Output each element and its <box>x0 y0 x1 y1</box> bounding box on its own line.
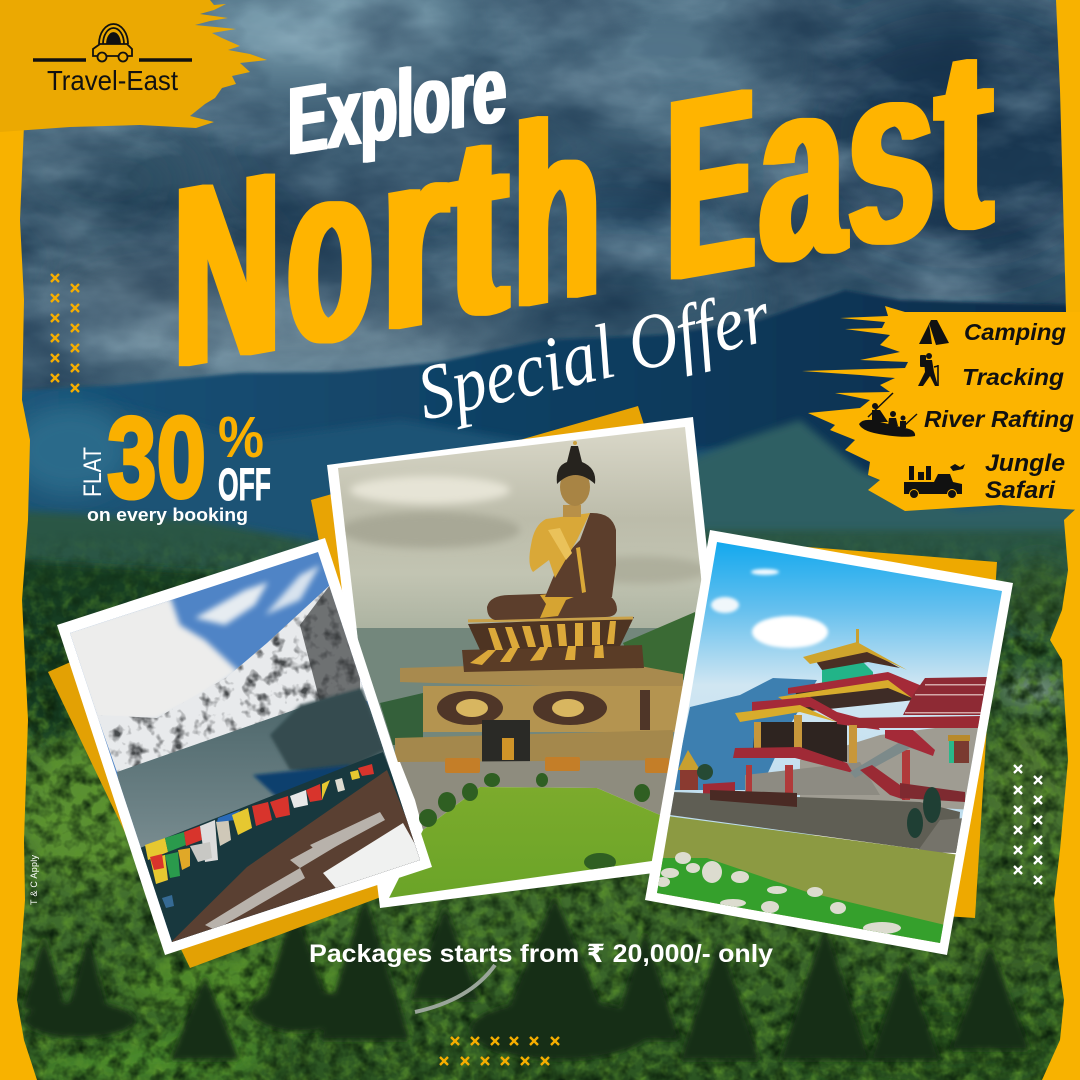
decorative crosses bottom <box>440 1037 559 1065</box>
price line: Packages starts from ₹ 20,000/- only <box>309 939 773 968</box>
road <box>415 965 495 1012</box>
decorative crosses left <box>51 274 79 392</box>
photo: lake <box>57 538 432 955</box>
meadow <box>655 816 960 945</box>
title: North East: E <box>667 33 755 337</box>
title: North East: o <box>288 101 372 403</box>
logo <box>0 0 267 132</box>
activities panel <box>802 306 1080 511</box>
flat label: FLAT <box>79 447 107 497</box>
jungle safari label: Jungle <box>985 450 1065 477</box>
logo splash <box>0 0 267 132</box>
discount badge <box>79 394 271 525</box>
booking line: on every booking <box>87 505 248 525</box>
white stone wing <box>800 722 982 810</box>
title: North East: t <box>448 77 508 375</box>
camping label: Camping <box>964 319 1066 345</box>
far mountain ridge <box>0 290 1080 480</box>
icon: safari truck <box>904 464 965 498</box>
yellow backing <box>311 406 700 700</box>
title: North East: a <box>760 17 845 320</box>
logo car icon <box>93 24 132 62</box>
percent: % <box>218 405 264 470</box>
logo name: Travel-East <box>47 65 178 96</box>
tracking label: Tracking <box>962 364 1064 390</box>
white frame <box>57 538 432 955</box>
title: North East <box>174 0 992 424</box>
subtitle: Special Offer: Special Offer <box>409 271 778 437</box>
jungle safari label: Safari <box>985 477 1056 504</box>
grass <box>389 787 660 898</box>
title: North East: N <box>174 117 280 424</box>
river rafting label: River Rafting <box>924 406 1074 432</box>
title: Explore: Explore <box>288 35 506 176</box>
icon: hiker <box>918 353 938 386</box>
dark underside <box>753 722 847 762</box>
photo backing: lake <box>48 560 432 968</box>
deck and stairs <box>733 747 853 773</box>
statue figure <box>487 592 617 620</box>
terms note: T & C Apply <box>29 854 39 905</box>
columns <box>754 715 857 763</box>
jungle safari label <box>985 450 1065 504</box>
off: OFF <box>218 459 271 510</box>
forest trees <box>22 895 1030 1060</box>
paving <box>400 760 690 830</box>
window <box>948 735 970 763</box>
title: North East: h <box>514 61 600 364</box>
title: North East: r <box>382 87 448 387</box>
side tower <box>678 750 700 790</box>
yellow splash <box>802 306 1080 511</box>
photo: monastery <box>645 530 1013 955</box>
brown slope <box>168 770 425 945</box>
white frame <box>645 530 1013 955</box>
white frame <box>327 417 740 908</box>
blue mountain <box>668 678 817 790</box>
statue base <box>400 666 683 686</box>
prayer flags <box>145 764 374 908</box>
photo: buddha statue <box>311 406 740 908</box>
photo backing: monastery <box>700 540 997 918</box>
decorative crosses right <box>1014 765 1042 884</box>
title: North East: s <box>848 2 934 305</box>
30: 30 <box>107 394 206 522</box>
stone wall <box>670 792 960 853</box>
icon: rafting <box>859 393 917 437</box>
logo rules <box>33 58 192 62</box>
icon: tent <box>919 320 949 345</box>
